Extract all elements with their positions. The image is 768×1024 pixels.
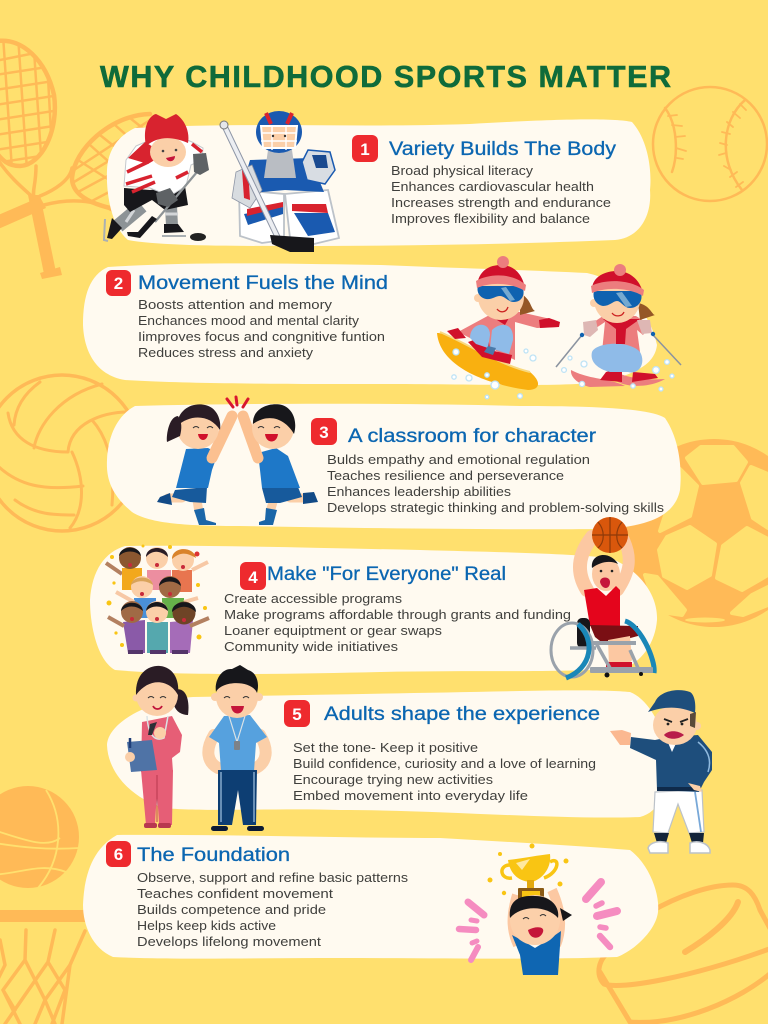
heading 4: Make "For Everyone" Real <box>267 564 506 585</box>
icon: snowboarder <box>437 256 560 390</box>
icon: coach pointing <box>610 690 712 853</box>
panel: section backgrounds <box>83 119 681 959</box>
text block 4: Make programs affordable through grants and funding <box>224 607 571 622</box>
text block 1: Improves flexibility and balance <box>391 211 590 226</box>
text block 5 <box>293 740 596 803</box>
icon: basketball background <box>0 786 79 888</box>
text block 6: Observe, support and refine basic patterns <box>137 870 409 885</box>
section 4: make for everyone real <box>224 562 571 654</box>
section 5: adults shape the experience <box>284 700 600 803</box>
text block 6: Develops lifelong movement <box>137 934 321 949</box>
section 3: a classroom for character <box>311 418 665 515</box>
text block 5: Set the tone- Keep it positive <box>293 740 478 755</box>
text block 2: Reduces stress and anxiety <box>138 345 314 360</box>
icon: soccer ball background <box>620 439 768 627</box>
section 2: movement fuels the mind <box>106 270 388 360</box>
heading 1: Variety Builds The Body <box>389 139 617 160</box>
text block 1: Broad physical literacy <box>391 163 534 178</box>
text block 1 <box>391 163 611 226</box>
text block 4 <box>224 591 571 654</box>
text block 6: Teaches confident movement <box>137 886 333 901</box>
number badge 5 <box>284 700 310 727</box>
section 1: variety builds the body <box>352 135 617 226</box>
number badge 1 <box>352 135 378 162</box>
icon: hockey puck background <box>599 885 768 1022</box>
icon: pink cheer marks <box>459 882 617 960</box>
number badge 2 <box>106 270 131 296</box>
text block 2: Boosts attention and memory <box>138 297 333 312</box>
number badge 1: 1 <box>360 140 370 159</box>
text block 4: Community wide initiatives <box>224 639 399 654</box>
number badge 6 <box>106 841 131 867</box>
text block 2: Iimproves focus and congnitive funtion <box>138 329 385 344</box>
icon: skier <box>556 264 681 387</box>
icon: hockey player <box>104 114 209 241</box>
icon: baseball background <box>653 87 767 201</box>
heading 6: The Foundation <box>137 845 290 866</box>
text block 2 <box>138 297 385 360</box>
icon: snow dots <box>452 349 674 399</box>
number badge 2: 2 <box>114 274 123 293</box>
heading 3: A classroom for character <box>348 426 597 447</box>
number badge 4: 4 <box>248 568 258 587</box>
text block 1: Increases strength and endurance <box>391 195 611 210</box>
text block 6: Helps keep kids active <box>137 918 276 933</box>
number badge 6: 6 <box>114 845 123 864</box>
text block 3: Bulds empathy and emotional regulation <box>327 452 590 467</box>
text block 3: Teaches resilience and perseverance <box>327 468 564 483</box>
text block 3: Enhances leadership abilities <box>327 484 512 499</box>
text block 2: Enchances mood and mental clarity <box>138 313 360 328</box>
text block 3 <box>327 452 665 515</box>
number badge 3 <box>311 418 337 445</box>
text block 3: Develops strategic thinking and problem-solving skills <box>327 500 665 515</box>
icon: woman teacher with clipboard <box>125 666 188 828</box>
icon: hockey goalie <box>220 111 339 252</box>
icon: children high five <box>157 397 318 525</box>
text block 6 <box>137 870 409 949</box>
number badge 3: 3 <box>319 423 329 442</box>
icon: tennis rackets background <box>0 38 152 279</box>
text block 5: Build confidence, curiosity and a love of learning <box>293 756 596 771</box>
icon: volleyball background <box>0 375 140 531</box>
title: WHY CHILDHOOD SPORTS MATTER <box>100 60 671 94</box>
text block 5: Embed movement into everyday life <box>293 788 528 803</box>
text block 1: Enhances cardiovascular health <box>391 179 594 194</box>
heading 2: Movement Fuels the Mind <box>138 273 388 294</box>
number badge 5: 5 <box>292 705 302 724</box>
text block 4: Create accessible programs <box>224 591 403 606</box>
text block 5: Encourage trying new activities <box>293 772 494 787</box>
icon: child with trophy <box>488 844 572 975</box>
icon: group of children <box>106 544 209 654</box>
text block 6: Builds competence and pride <box>137 902 326 917</box>
number badge 4 <box>240 562 266 590</box>
text block 4: Loaner equiptment or gear swaps <box>224 623 443 638</box>
section 6: the foundation <box>106 841 409 949</box>
icon: basketball hoop and net background <box>0 910 88 1024</box>
icon: wheelchair basketball player <box>551 517 654 678</box>
icon: man teacher with whistle <box>208 665 267 831</box>
heading 5: Adults shape the experience <box>324 704 600 725</box>
